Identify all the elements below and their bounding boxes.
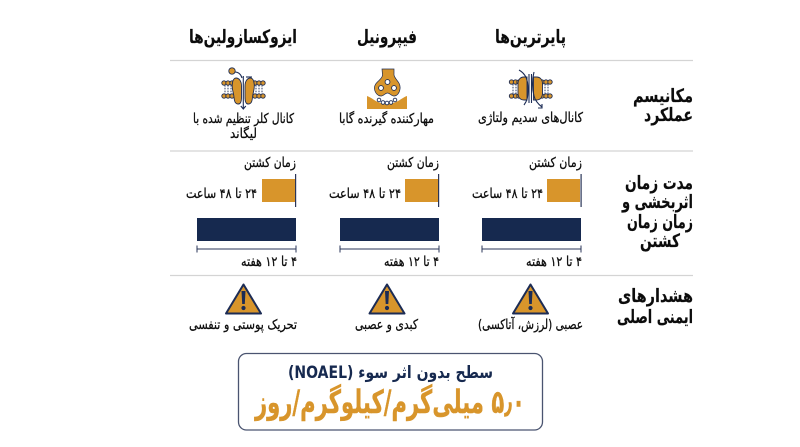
row label: mechanism of action: عملکرد (644, 105, 693, 126)
row label: duration of efficacy and kill time: اثربخشی و (621, 192, 693, 213)
chart: fipronil timing: ۲۴ تا ۴۸ ساعت (329, 186, 401, 202)
chart: fipronil timing (329, 155, 439, 270)
chart: isoxazolines timing: ۲۴ تا ۴۸ ساعت (186, 186, 257, 202)
caption: neurological warning: عصبی (لرزش، آتاکسی) (478, 316, 583, 333)
icon: GABA receptor blocker (367, 69, 407, 109)
chart: fipronil timing: ۴ تا ۱۲ هفته (384, 254, 439, 270)
chart: pyrethrins timing: زمان کشتن (529, 155, 582, 171)
row label: duration of efficacy and kill time: کشتن (640, 231, 680, 252)
column heading: isoxazolines: ایزوکسازولین‌ها (189, 27, 297, 48)
caption: GABA receptor blocker: مهارکننده گیرنده گابا (339, 110, 434, 127)
caption: voltage-gated sodium channels: کانال‌های سدیم ولتاژی (478, 110, 583, 126)
callout heading: سطح بدون اثر سوء (NOAEL) (288, 363, 493, 383)
column heading: fipronil: فیپرونیل (357, 27, 417, 48)
row label: duration of efficacy and kill time: مدت زمان (625, 173, 693, 194)
caption: ligand-gated chloride channel (193, 111, 294, 142)
caption: ligand-gated chloride channel: لیگاند (230, 125, 257, 142)
row label: main safety warnings (617, 286, 693, 328)
column heading: pyrethrins: پایرترین‌ها (495, 27, 566, 48)
chart: pyrethrins timing: ۴ تا ۱۲ هفته (526, 254, 582, 270)
callout value: ۵٫۰ میلی‌گرم/کیلوگرم/روز (254, 383, 525, 421)
caption: hepatic and neurological warning: کبدی و عصبی (355, 317, 418, 333)
row label: duration of efficacy and kill time (621, 173, 693, 252)
icon: warning triangle, pyrethrins (513, 284, 548, 314)
chart: pyrethrins timing: ۲۴ تا ۴۸ ساعت (472, 186, 543, 202)
caption: ligand-gated chloride channel: کانال کلر تنظیم شده با (193, 111, 294, 127)
chart: isoxazolines timing (186, 155, 297, 270)
row label: mechanism of action (633, 86, 693, 126)
chart: isoxazolines timing: زمان کشتن (244, 155, 296, 171)
icon: warning triangle, isoxazolines (226, 284, 261, 314)
chart: pyrethrins timing (472, 155, 582, 270)
chart: isoxazolines timing: ۴ تا ۱۲ هفته (241, 254, 297, 270)
icon: voltage-gated sodium channel (509, 70, 552, 108)
row label: duration of efficacy and kill time: زمان زمان (627, 212, 693, 233)
icon: warning triangle, fipronil (370, 284, 404, 314)
callout: NOAEL (238, 354, 542, 430)
icon: ligand-gated chloride channel (222, 68, 265, 109)
row label: main safety warnings: ایمنی اصلی (617, 307, 693, 328)
caption: skin and respiratory irritation warning: تحریک پوستی و تنفسی (189, 317, 297, 333)
chart: fipronil timing: زمان کشتن (387, 155, 439, 171)
row label: mechanism of action: مکانیسم (633, 86, 693, 107)
row label: main safety warnings: هشدارهای (618, 286, 693, 307)
